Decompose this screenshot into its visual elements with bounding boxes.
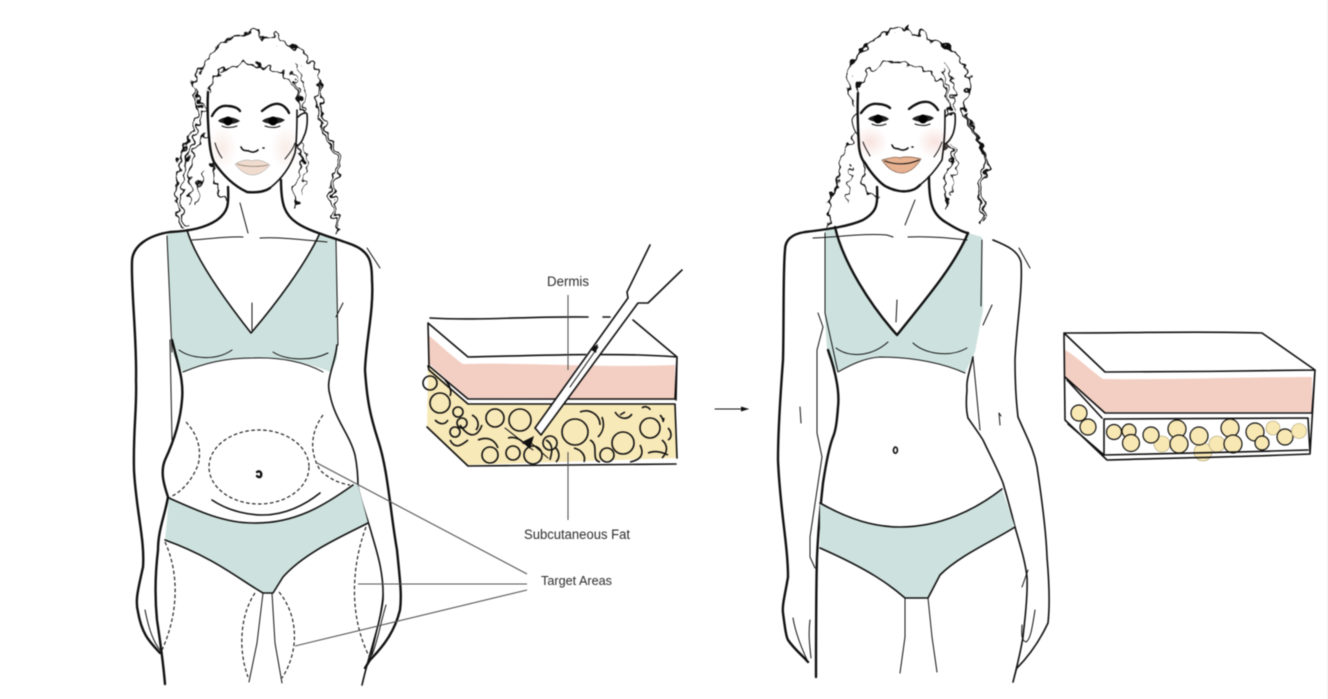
- dermis layer: [428, 335, 675, 399]
- face: right figure: [852, 93, 955, 191]
- label: dermis: Dermis: [547, 274, 589, 289]
- nose: [892, 145, 913, 150]
- figure: before treatment: [132, 30, 401, 685]
- leader: dermis: [567, 295, 569, 370]
- belly curve: [212, 493, 320, 515]
- skin cross-section: before: [423, 245, 682, 542]
- dermis layer: [1065, 350, 1312, 412]
- figure: after treatment: [778, 27, 1049, 682]
- nose: [241, 147, 264, 152]
- body outline: right figure: [778, 177, 1049, 682]
- arrow: before to after: [715, 406, 749, 412]
- ear: [297, 113, 307, 146]
- blush: [852, 126, 888, 158]
- eyebrows: [861, 102, 938, 113]
- eyebrows: [212, 104, 289, 116]
- callout: target areas: [295, 463, 612, 646]
- bra: left figure: [167, 230, 338, 372]
- face: left figure: [207, 92, 307, 192]
- page edge: [1326, 0, 1328, 699]
- label: subcutaneous fat: Subcutaneous Fat: [524, 527, 630, 542]
- underwear: right figure: [820, 489, 1015, 598]
- fat cells: [1071, 405, 1306, 461]
- fat cells: [423, 376, 671, 464]
- navel: [257, 471, 261, 477]
- eyes: [868, 114, 934, 126]
- needle: [535, 296, 638, 435]
- underwear: left figure: [165, 485, 368, 593]
- body outline: left figure: [132, 180, 401, 685]
- skin cross-section: after: [1064, 332, 1315, 461]
- needle arrows: [505, 344, 598, 458]
- block outline: [427, 317, 677, 466]
- hair: right figure: [828, 27, 988, 227]
- leader lines: [295, 463, 527, 646]
- hair: left figure: [176, 30, 341, 237]
- blush: [207, 126, 237, 170]
- block outline: [1064, 332, 1315, 460]
- lips: [235, 160, 270, 175]
- bra: right figure: [825, 227, 983, 373]
- eyes: [218, 116, 285, 128]
- dashed target areas: [162, 415, 370, 678]
- navel: [893, 447, 897, 453]
- label: target areas: Target Areas: [541, 573, 612, 588]
- leader: subcutaneous fat: [567, 452, 569, 520]
- fat layer: [427, 366, 677, 465]
- lips: [882, 157, 921, 173]
- ears: [945, 113, 955, 144]
